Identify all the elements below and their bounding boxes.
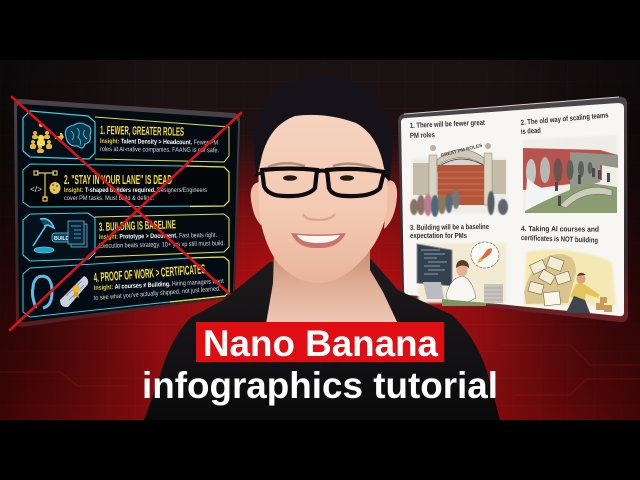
person: smiling man with glasses [144,77,500,420]
icon: code brackets: </> [30,185,42,194]
heading: 1. FEWER, GREATER ROLES [100,123,184,139]
face [258,112,388,283]
insight text: Insight: Prototype > Document. Fast beats right. [99,232,217,241]
illustration: buried in certificates [524,250,616,313]
title: Nano Banana: Nano Banana [203,323,438,364]
caption 3 second line: expectation for PMs [410,231,467,240]
hair [254,77,392,182]
row 3: building is baseline [23,213,229,261]
illustration: gate with brick wall [410,143,508,217]
row 4: proof of work [23,257,229,317]
caption 1 second line: PM roles [410,130,435,140]
row 4 second line: to see what you've actually shipped, not just learned. [94,285,221,302]
panel: left futuristic infographic (crossed out) [14,99,240,327]
red cross over left panel [10,97,241,330]
glasses [255,168,390,196]
icon: scroll with medal [60,276,88,307]
icon: T-shape tool [34,171,57,201]
smile [291,233,346,248]
illustration: PM coding at desk [417,242,506,306]
row 2 second line: cover PM tasks. Must build & define. [64,195,154,202]
heading: 2. "STAY IN YOUR LANE" IS DEAD [64,172,172,187]
illustration: crumbling aqueduct [523,135,618,213]
heading: 3. BUILDING IS BASELINE [99,217,176,234]
eyes [283,175,354,181]
caption 3: 3. Building will be a baseline [410,222,489,232]
icon: hammer [33,219,54,253]
neck [266,240,398,324]
eyebrows [268,163,376,169]
group of people [410,189,508,217]
panel screen [17,104,238,322]
panel frame [398,97,628,322]
icon: github ring [32,276,52,308]
insight text: Insight: T-shaped builders required. Designers/Engineers [64,187,208,194]
row 4: proof of work: 4. PROOF OF WORK > CERTIFICATES [93,261,206,285]
bottom letterbox bar [0,420,640,480]
icon: people cluster [30,123,52,153]
insight text: Insight: AI courses ≠ Building. Hiring managers want [94,278,224,292]
insight text: Insight: Talent Density > Headcount. Fewer PM [100,138,218,147]
icon: build label: BUILD [54,236,69,242]
caption 1: 1. There will be fewer great [410,118,485,130]
illustration: gate with brick wall: GREAT PM ROLES [440,143,484,159]
nose [303,214,335,220]
subtitle: infographics tutorial: infographics tutorial [142,365,498,406]
row 2: stay in your lane [23,164,229,207]
panel page [401,103,624,316]
row 1: fewer, greater roles [23,111,229,162]
caption 4 second line: certificates is NOT building [521,233,599,245]
caption 2 second line: is dead [521,126,541,136]
ears [251,180,397,229]
icon: build label [52,233,71,242]
caption 4: 4. Taking AI courses and [521,224,599,234]
row 3 second line: Execution beats strategy. 10+ yrs xp still must build. [99,240,225,250]
panel: right sketch infographic [398,97,628,322]
icon: documents [68,221,87,247]
icon: palette [50,182,60,194]
caption 2: 2. The old way of scaling teams [520,110,609,127]
icon: arrow [55,133,64,142]
body: dark sweater [144,258,500,420]
thought bubble with rocket [471,242,499,268]
icon: brain [65,123,91,148]
panel frame [14,99,240,327]
row 1 second line: roles at AI-native companies. FAANG is not safe. [100,146,219,154]
